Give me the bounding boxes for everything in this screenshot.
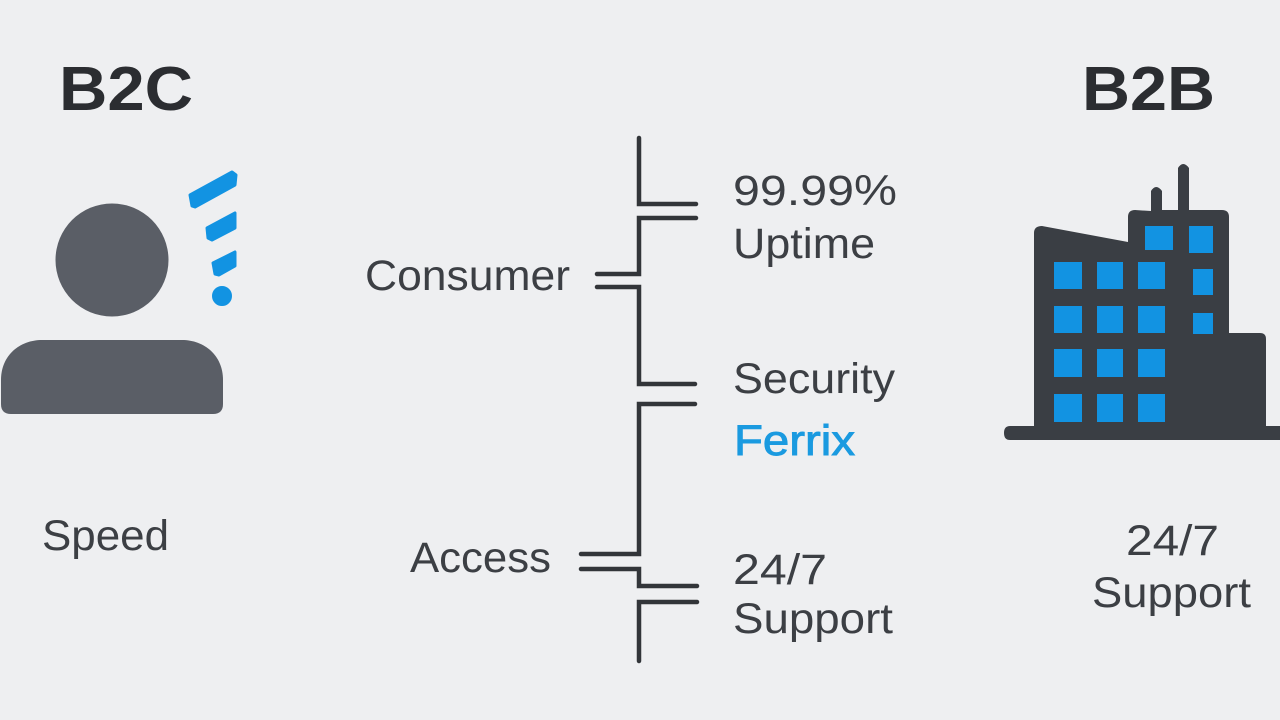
label: Consumer: Consumer bbox=[365, 252, 570, 300]
signal bars bbox=[190, 172, 236, 304]
label: right 24/7: 24/7 bbox=[1126, 517, 1219, 565]
person head bbox=[56, 204, 168, 316]
label: Access: Access bbox=[410, 534, 551, 582]
icon: office building bbox=[1004, 164, 1280, 440]
building windows bbox=[1054, 226, 1213, 422]
label: Security: Security bbox=[733, 355, 896, 403]
label: Support: Support bbox=[733, 595, 893, 643]
icon: consumer person with signal bbox=[1, 172, 236, 414]
bracket tree connector bbox=[581, 138, 697, 661]
person body bbox=[1, 340, 223, 414]
label: Uptime: Uptime bbox=[733, 220, 875, 268]
label: 24/7: 24/7 bbox=[733, 546, 827, 594]
label: right Support: Support bbox=[1092, 569, 1251, 617]
label: 99.99%: 99.99% bbox=[733, 167, 897, 215]
heading: B2B: B2B bbox=[1082, 55, 1215, 124]
label: Ferrix: Ferrix bbox=[734, 417, 856, 465]
heading: B2C: B2C bbox=[59, 55, 193, 124]
label: Speed: Speed bbox=[42, 512, 169, 560]
building silhouette bbox=[1004, 164, 1280, 440]
